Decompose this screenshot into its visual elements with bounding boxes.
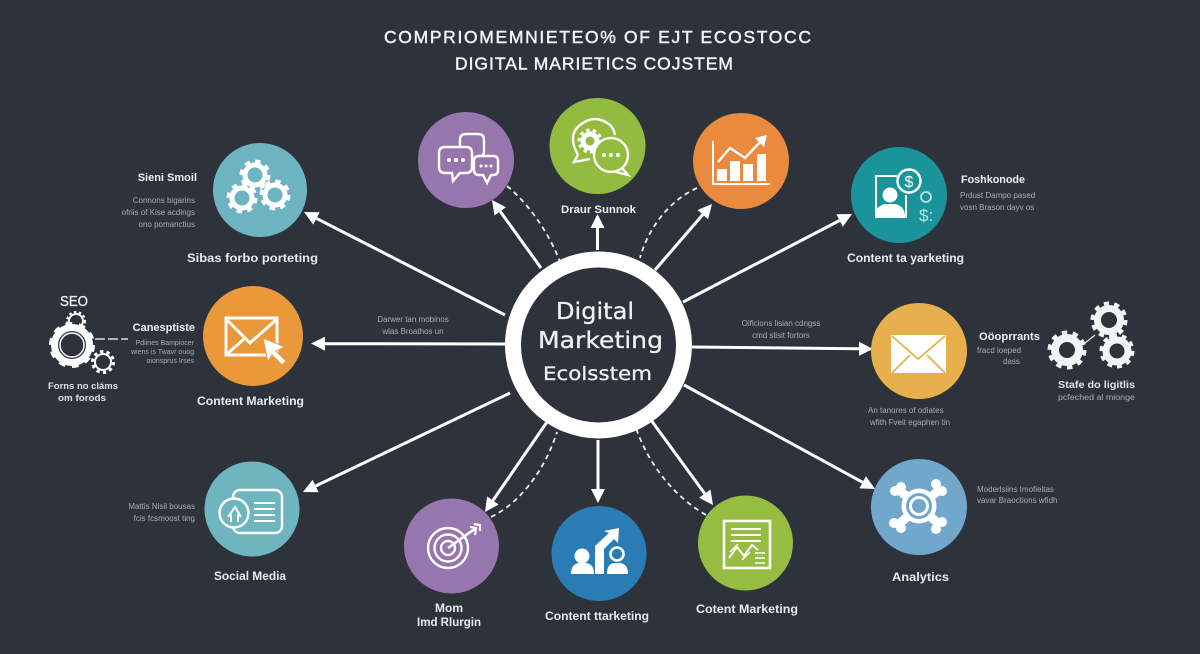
description: [128, 502, 195, 523]
heading: Oöoprrants: [979, 331, 1040, 343]
description: Moderlsiins Imofieltas: [977, 485, 1054, 494]
label: Cotent Marketing: [696, 604, 798, 616]
circle: [698, 496, 793, 590]
arrow to content marketing left: [311, 337, 505, 351]
dashed connectors: [491, 186, 706, 517]
description: Prdust Dampo pased: [960, 191, 1035, 200]
node: orange chart: [693, 113, 789, 209]
node: green document: [696, 496, 798, 616]
circle: [552, 506, 646, 601]
description: [977, 485, 1057, 505]
note: right of hub: Oiflcions lisian cdngss: [742, 319, 820, 328]
caption note: pcfeched al mionge: [1058, 393, 1136, 402]
note: left of hub: [377, 315, 449, 336]
icon: report: [724, 521, 770, 568]
arrow to social icon: [304, 212, 505, 315]
description: wiens is Twavr ouog: [130, 349, 194, 356]
note: left of hub: wlas Broathos un: [381, 327, 444, 336]
description: oionsprus Irses: [147, 358, 194, 365]
heading: SEO: [60, 294, 88, 310]
description: ofriis of Kise acdings: [122, 208, 195, 217]
SEO block: [48, 294, 128, 404]
icon: three gears: [228, 162, 288, 212]
description: [977, 346, 1021, 366]
note: right of hub: cmd slisit fortors: [752, 331, 810, 340]
circle: [418, 112, 514, 208]
heading: Sieni Smoil: [138, 172, 197, 184]
label: Content Marketing: [197, 396, 304, 408]
node: green chat: [550, 98, 646, 216]
title: DIGITAL MARIETICS COJSTEM: [455, 54, 733, 74]
icon: card: [220, 490, 282, 533]
label: [417, 603, 481, 629]
arrow to purple chat: [492, 200, 541, 268]
circle: [871, 459, 967, 555]
hub text: Ecolsstem: [543, 363, 652, 385]
icon: gears: [1050, 304, 1132, 367]
label: Content ttarketing: [545, 611, 649, 623]
label: Mom: [435, 603, 463, 615]
heading: Canesptiste: [133, 322, 195, 334]
hub text: Digital: [556, 299, 634, 325]
node: teal gears: [122, 143, 318, 265]
label: Draur Sunnok: [561, 204, 637, 216]
right gears block: [1050, 304, 1136, 402]
node: orange email: [130, 286, 304, 408]
note: left of hub: Darwer tan mobinos: [377, 315, 449, 324]
caption: [48, 381, 118, 404]
icon: envelope with cursor: [226, 318, 286, 365]
description: fcis fcsmoost ting: [134, 514, 195, 523]
caption: Forns no cláms: [48, 381, 118, 392]
heading: Foshkonode: [961, 174, 1025, 186]
circle: [871, 303, 967, 399]
circle: [693, 113, 789, 209]
description: ono pomanctius: [139, 220, 195, 229]
arrow to green chat: [590, 214, 604, 250]
circle: [550, 98, 646, 194]
node: dark teal finance: [847, 147, 1035, 265]
title: [384, 27, 811, 74]
description: Pdiines Bampiocer: [136, 340, 195, 347]
arrow to yellow envelope: [692, 342, 873, 356]
icon: chat bubbles: [439, 134, 498, 183]
central hub: [513, 260, 684, 430]
node: purple chat: [418, 112, 514, 208]
arrow to social media: [303, 393, 510, 492]
circle: [851, 147, 947, 243]
note: right of hub: [742, 319, 820, 340]
label: Sibas forbo porteting: [187, 253, 318, 265]
note: [868, 406, 950, 427]
circle: [203, 286, 303, 386]
icon: people and growth arrow: [571, 528, 628, 574]
icon: person with dollar: [875, 170, 933, 225]
arrow to teal finance: [683, 214, 852, 302]
description: dass: [1003, 357, 1020, 366]
icon: hub with bones: [889, 479, 947, 534]
arrow to orange chart: [655, 204, 712, 270]
node: yellow email: [868, 303, 1040, 427]
description: [130, 340, 195, 365]
node: teal social media: [128, 462, 300, 583]
hub text: Marketing: [538, 328, 663, 354]
label: Analytics: [892, 572, 949, 584]
icon: bar chart: [713, 135, 770, 184]
icon: speech bubbles with gear: [573, 119, 628, 175]
icon: target with arrow: [428, 524, 480, 568]
description: [960, 191, 1035, 212]
arrows: [303, 200, 875, 512]
caption: om forods: [58, 393, 106, 404]
label: Imd Rlurgin: [417, 617, 481, 629]
label: Social Media: [214, 571, 287, 583]
description: [122, 196, 195, 229]
description: vavar Braoctions wfidh: [977, 496, 1057, 505]
icon: SEO gears: [51, 312, 128, 372]
hub text: [538, 299, 663, 385]
icon: person with dollar: $:: [919, 206, 933, 225]
caption: Stafe do ligitlis: [1058, 380, 1135, 391]
description: Connons bigarins: [133, 196, 195, 205]
note: wfith Fveit egaphen tin: [869, 418, 950, 427]
icon: person with dollar: $: [905, 174, 914, 191]
arrow to green document: [651, 420, 713, 505]
description: vosn Brason dayv os: [960, 203, 1034, 212]
circle: [404, 498, 499, 594]
hub ring: [513, 260, 684, 430]
node: blue people: [545, 506, 649, 623]
title: COMPRIOMEMNIETEO% OF EJT ECOSTOCC: [384, 27, 811, 47]
arrow to purple target: [485, 422, 547, 512]
circle: [213, 143, 307, 237]
arrow to blue people: [591, 440, 605, 503]
description: fracd loeped: [977, 346, 1021, 355]
note: An tanores of odiates: [868, 406, 944, 415]
arrow to analytics: [684, 385, 875, 489]
node: purple target: [404, 498, 499, 629]
node: light blue analytics: [871, 459, 1057, 584]
icon: envelope: [891, 335, 946, 373]
label: Content ta yarketing: [847, 253, 964, 265]
description: Mattis Nlsil bousas: [128, 502, 195, 511]
circle: [204, 462, 300, 556]
